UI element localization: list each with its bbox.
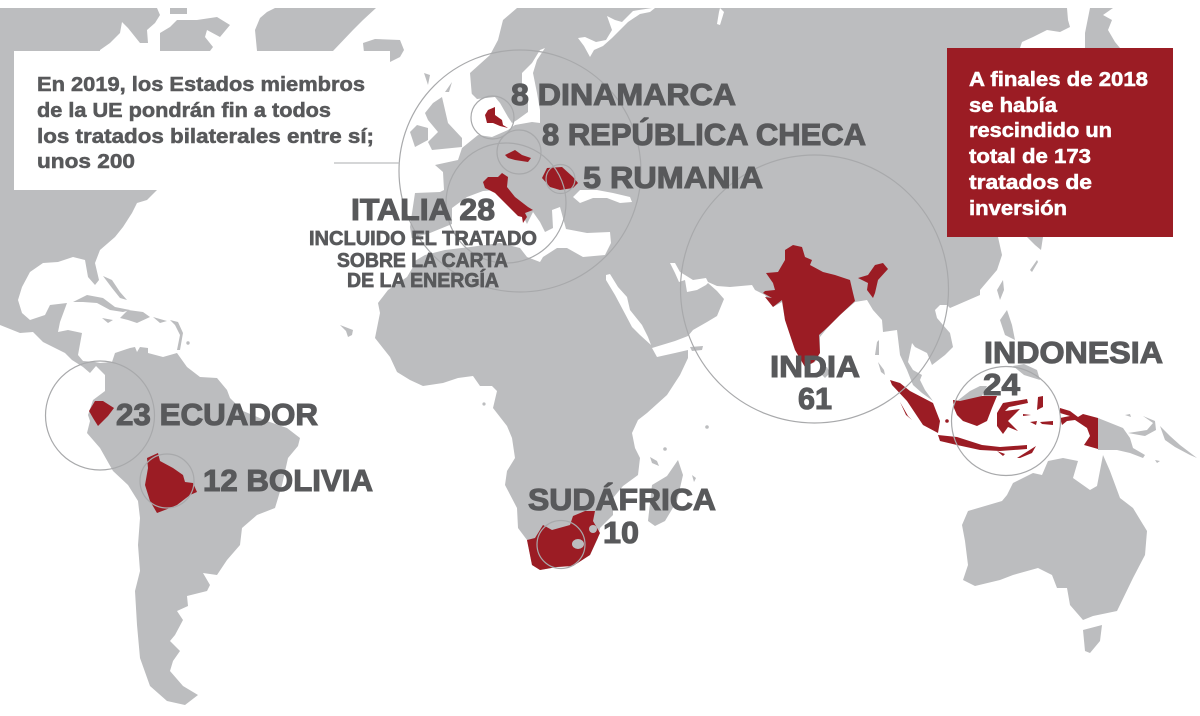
country: Czech Republic [505,150,531,162]
label: Italia [309,192,537,292]
callout: 173 treaties terminated: inversión [969,197,1067,220]
label: Indonesia: INDONESIA [984,335,1163,370]
label: Italia: DE LA ENERGÍA [347,269,499,292]
label: Bolivia: 12 BOLIVIA [203,463,373,498]
callout: 173 treaties terminated: se había [969,94,1058,117]
country: Romania [542,167,578,190]
label: Italia: ITALIA 28 [351,192,495,227]
country: Italy [483,173,533,223]
seas: Baltic, White Sea, Black Sea, Mediterranean, Red Sea [405,8,724,345]
landmass: Kamchatka, Japan, Taiwan, Philippines [957,8,1120,403]
country: Ecuador [89,401,114,426]
callout: 173 treaties terminated: rescindido un [969,119,1112,142]
callout: EU member states: los tratados bilaterales entre sí; [37,125,374,148]
country: South Africa [527,511,600,570]
callout: EU member states: unos 200 [37,150,135,173]
country: Bolivia [145,453,197,513]
label: Sudáfrica: SUDÁFRICA [528,482,716,517]
country: Indonesia [890,380,1098,458]
landmass: Eurasia and Africa [375,8,1070,570]
landmass: Americas [0,8,376,705]
label: Dinamarca: 8 DINAMARCA [511,77,736,112]
callout: 173 treaties terminated [947,48,1173,237]
label: Indonesia [983,335,1163,402]
label: India: INDIA [770,349,860,384]
callout: 173 treaties terminated: total de 173 [969,145,1091,168]
country: Denmark [485,107,508,128]
landmass: Madagascar and Indian Ocean islands [648,340,885,526]
callout: 173 treaties terminated: tratados de [969,171,1092,194]
callout: EU member states [14,51,400,190]
landmass: Australia, Tasmania, Papua, Pacific islands [962,414,1197,653]
label: Italia: SOBRE LA CARTA [337,250,508,272]
label: República Checa: 8 REPÚBLICA CHECA [542,116,866,152]
callout: EU member states: de la UE pondrán fin a todos [37,99,331,122]
label: Sudáfrica [528,482,716,550]
bubble circles [46,50,1060,568]
label: India: 61 [798,381,832,416]
label: India [770,349,860,416]
landmass: islands of Europe and the Atlantic [340,39,486,406]
label: Italia: INCLUIDO EL TRATADO [309,228,537,250]
label: Rumania: 5 RUMANIA [583,160,763,195]
label: Ecuador: 23 ECUADOR [116,397,318,432]
label: Indonesia: 24 [983,367,1021,402]
callout: 173 treaties terminated: A finales de 2018 [969,68,1148,91]
callout: EU member states: En 2019, los Estados miembros [37,73,365,96]
country: India [763,245,888,367]
label: Sudáfrica: 10 [603,515,639,550]
